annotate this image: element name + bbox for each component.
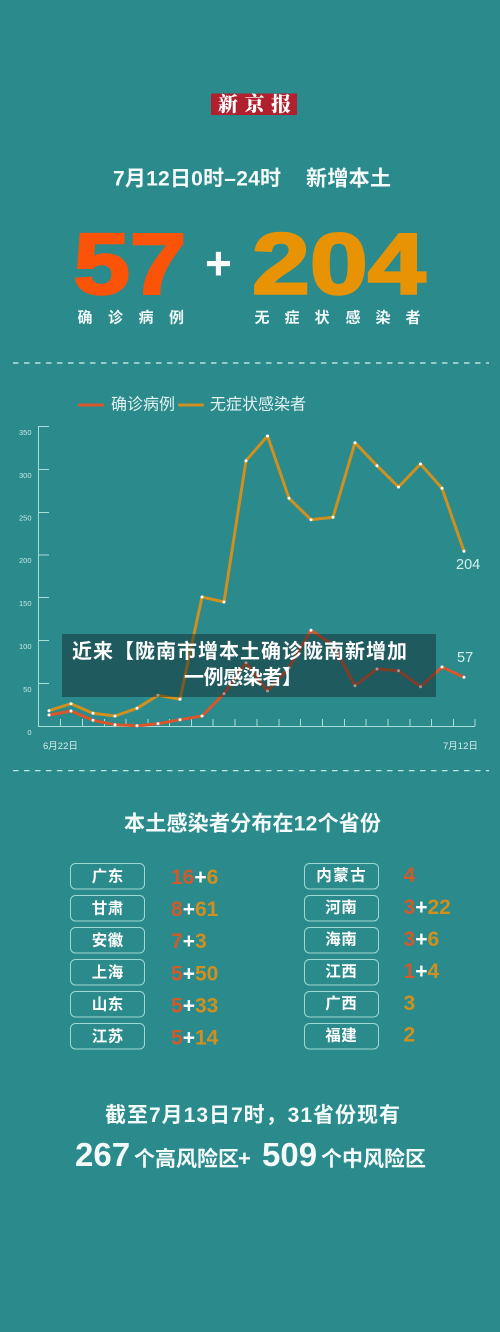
row: 河南 <box>304 896 451 921</box>
row: 广西: 3 <box>404 992 415 1015</box>
headline overlay banner: 一例感染者】 <box>184 666 302 689</box>
label: confirmed cases: 确诊病例 <box>77 308 184 326</box>
chart legend: 无症状感染者 <box>210 396 306 414</box>
row: 山东 <box>70 992 218 1018</box>
row: 内蒙古 <box>304 864 416 889</box>
end label 57: 57 <box>457 650 473 666</box>
end label 204: 204 <box>456 557 480 573</box>
confirmed series line <box>48 629 466 727</box>
y axis labels: 350 <box>19 428 32 437</box>
footer: as-of statement: 截至7月13日7时，31省份现有 <box>105 1104 400 1127</box>
row: 福建 <box>304 1024 415 1049</box>
y axis labels: 100 <box>19 642 32 651</box>
row: 广东 <box>70 864 218 889</box>
row: 甘肃: 8+61 <box>171 898 219 921</box>
footer: risk area counts: 509 <box>262 1136 317 1173</box>
row: 福建: 福建 <box>325 1026 357 1044</box>
row: 内蒙古: 内蒙古 <box>316 866 366 884</box>
headline overlay banner: 近来【陇南市增本土确诊陇南新增加 <box>72 639 407 663</box>
row: 江苏: 5+14 <box>171 1026 219 1050</box>
x axis labels: 7月12日 <box>443 741 478 752</box>
row: 安徽: 7+3 <box>171 930 207 953</box>
chart legend <box>78 396 306 414</box>
row: 甘肃: 甘肃 <box>92 900 123 918</box>
row: 上海 <box>70 960 218 986</box>
big number: 57 confirmed cases: 57 <box>74 216 186 312</box>
footer: risk area counts: 个高风险区 <box>134 1147 239 1171</box>
row: 江西: 江西 <box>325 962 357 980</box>
y axis labels: 300 <box>19 471 32 480</box>
asymptomatic series line <box>48 434 466 718</box>
y axis labels: 0 <box>27 728 32 737</box>
row: 福建: 2 <box>404 1024 415 1046</box>
x axis labels: 6月22日 <box>43 741 78 752</box>
row: 上海: 5+50 <box>171 962 218 986</box>
province list: left column <box>70 864 219 1050</box>
row: 广西: 广西 <box>325 994 357 1012</box>
x axis labels <box>43 741 478 752</box>
chart axes <box>38 426 475 726</box>
row: 海南: 3+6 <box>404 928 439 951</box>
headline overlay banner <box>62 634 436 697</box>
row: 河南: 河南 <box>325 898 357 916</box>
y axis labels: 200 <box>19 556 32 565</box>
row: 江西 <box>304 960 439 985</box>
line chart <box>19 426 480 752</box>
row: 广东: 16+6 <box>171 866 218 889</box>
plus sign: + <box>205 237 232 289</box>
logo: 新京报: 新京报 <box>218 88 291 117</box>
row: 海南: 海南 <box>325 930 357 948</box>
row: 山东: 山东 <box>92 994 123 1014</box>
row: 海南 <box>304 928 439 953</box>
footer: risk area counts: 个中风险区 <box>321 1147 426 1171</box>
row: 甘肃 <box>70 896 219 921</box>
footer: risk area counts: 267 <box>75 1136 130 1173</box>
row: 江苏: 江苏 <box>92 1026 123 1046</box>
row: 安徽: 安徽 <box>92 932 124 950</box>
row: 山东: 5+33 <box>171 994 218 1018</box>
y axis labels <box>19 428 32 737</box>
label: asymptomatic cases: 无症状感染者 <box>254 308 421 326</box>
y axis labels: 50 <box>23 685 32 694</box>
heading: date and new local cases: 7月12日0时–24时 <box>113 168 281 190</box>
row: 河南: 3+22 <box>404 896 451 919</box>
row: 广东: 广东 <box>92 866 123 886</box>
row: 江西: 1+4 <box>404 960 439 983</box>
footer: risk area counts: + <box>238 1146 251 1171</box>
row: 江苏 <box>70 1024 219 1050</box>
heading: date and new local cases: 新增本土 <box>306 166 391 190</box>
section heading: distribution in 12 provinces: 本土感染者分布在12个省份 <box>124 812 381 836</box>
y axis labels: 150 <box>19 599 32 608</box>
big number: 204 asymptomatic cases: 204 <box>252 217 426 312</box>
y axis labels: 250 <box>19 514 32 522</box>
footer: risk area counts <box>75 1136 426 1173</box>
row: 内蒙古: 4 <box>404 864 416 887</box>
province list: right column <box>304 864 451 1049</box>
row: 安徽 <box>70 928 207 953</box>
heading: date and new local cases <box>113 166 391 190</box>
row: 上海: 上海 <box>92 964 124 982</box>
chart legend: 确诊病例 <box>111 396 175 414</box>
row: 广西 <box>304 992 415 1017</box>
